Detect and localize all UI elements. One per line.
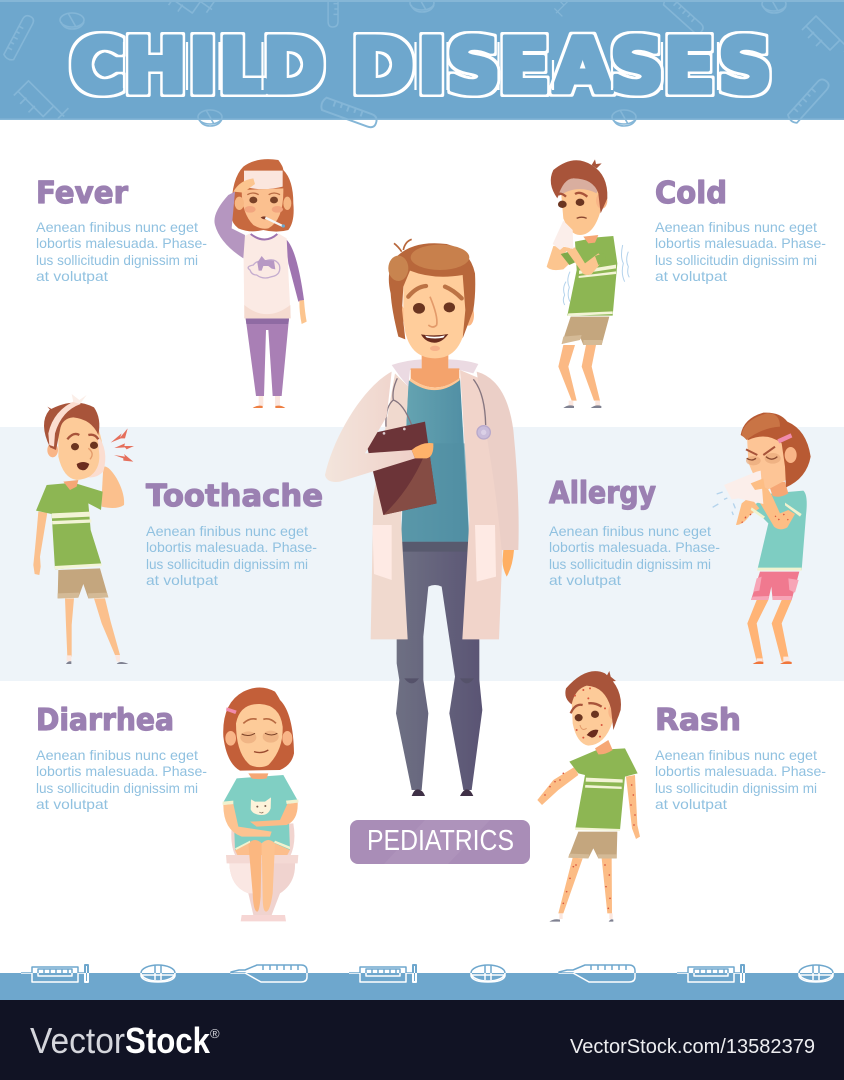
doctor arm and hand: [325, 372, 415, 482]
header pattern of medical icons: [3, 0, 844, 129]
footer bar: [0, 1000, 844, 1080]
figure: doctor: [325, 239, 519, 796]
doctor clipboard: [364, 422, 437, 515]
footer image id: VectorStock.com/13582379: [570, 1036, 815, 1058]
text block: toothache description: [146, 523, 317, 588]
text block: allergy description: Aenean finibus nunc eget: [549, 523, 711, 539]
figure: fever girl: [214, 159, 307, 408]
text block: cold description: Aenean finibus nunc eget: [655, 219, 817, 235]
cold boy arms: [547, 246, 572, 270]
sneeze droplets: [713, 492, 735, 515]
header banner: [0, 0, 844, 129]
panel: cold: [655, 176, 826, 284]
bottom icon row: [21, 965, 833, 982]
text block: fever description: [36, 219, 207, 284]
text block: rash description: lus sollicitudin dignissim mi: [655, 780, 817, 796]
text block: cold description: at volutpat: [655, 268, 727, 284]
doctor stethoscope: [386, 378, 490, 439]
text block: toothache description: Aenean finibus nunc eget: [146, 523, 308, 539]
text block: toothache description: lobortis malesuada. Phase-: [146, 539, 317, 555]
heading: Diarrhea: Diarrhea: [36, 703, 174, 738]
text block: allergy description: [549, 523, 720, 588]
title: DISEASES: [352, 24, 772, 110]
bottom ribbon: [0, 973, 844, 1000]
pediatrics label: PEDIATRICS: [367, 825, 514, 857]
background band: middle row: [0, 427, 844, 681]
panel: fever: [36, 176, 207, 284]
figure: diarrhea girl: [223, 687, 298, 921]
pain bolts: [111, 428, 134, 462]
text block: fever description: lus sollicitudin dignissim mi: [36, 252, 198, 268]
text block: rash description: Aenean finibus nunc eget: [655, 747, 817, 763]
text block: toothache description: lus sollicitudin dignissim mi: [146, 556, 308, 572]
footer logo: Stock: [125, 1020, 211, 1061]
cold shiver lines: [563, 245, 629, 305]
text block: diarrhea description: Aenean finibus nunc eget: [36, 747, 198, 763]
text block: allergy description: lus sollicitudin dignissim mi: [549, 556, 711, 572]
title: CHILD: [70, 24, 324, 110]
text block: diarrhea description: lus sollicitudin dignissim mi: [36, 780, 198, 796]
neck: [768, 482, 788, 497]
text block: diarrhea description: [36, 747, 207, 812]
heading: Rash: Rash: [655, 703, 741, 738]
rash spots: [544, 687, 636, 909]
doctor shoes: [412, 789, 473, 796]
text block: rash description: lobortis malesuada. Phase-: [655, 763, 826, 779]
pediatrics label: [350, 820, 530, 864]
doctor coat: [371, 359, 519, 639]
figure: allergy girl: [713, 413, 811, 664]
doctor shirt: [401, 378, 469, 542]
title: [70, 24, 772, 110]
text block: cold description: [655, 219, 826, 284]
figure: toothache boy: [33, 394, 134, 664]
panel: diarrhea: [36, 703, 207, 812]
heading: Toothache: Toothache: [146, 479, 323, 514]
heading: Cold: Cold: [655, 176, 727, 211]
text block: diarrhea description: lobortis malesuada. Phase-: [36, 763, 207, 779]
doctor trousers: [396, 542, 482, 790]
doctor neck: [411, 343, 459, 387]
figure: rash boy: [537, 671, 640, 922]
toilet: [226, 823, 298, 921]
figure: cold boy: [547, 159, 629, 408]
allergy girl arms: [736, 497, 759, 525]
footer logo: ®: [210, 1026, 220, 1041]
panel: toothache: [146, 479, 323, 588]
text block: rash description: [655, 747, 826, 812]
panel: allergy: [549, 476, 720, 588]
text block: allergy description: at volutpat: [549, 572, 621, 588]
doctor head: [388, 239, 475, 358]
heading: Allergy: Allergy: [549, 476, 656, 511]
footer logo: [30, 1020, 220, 1061]
text block: toothache description: at volutpat: [146, 572, 218, 588]
text block: rash description: at volutpat: [655, 796, 727, 812]
panel: rash: [655, 703, 826, 812]
text block: cold description: lus sollicitudin dignissim mi: [655, 252, 817, 268]
text block: fever description: lobortis malesuada. Phase-: [36, 235, 207, 251]
footer logo: Vector: [30, 1020, 125, 1061]
text block: cold description: lobortis malesuada. Phase-: [655, 235, 826, 251]
text block: diarrhea description: at volutpat: [36, 796, 108, 812]
text block: fever description: Aenean finibus nunc eget: [36, 219, 198, 235]
heading: Fever: Fever: [36, 176, 128, 211]
text block: fever description: at volutpat: [36, 268, 108, 284]
text block: allergy description: lobortis malesuada. Phase-: [549, 539, 720, 555]
